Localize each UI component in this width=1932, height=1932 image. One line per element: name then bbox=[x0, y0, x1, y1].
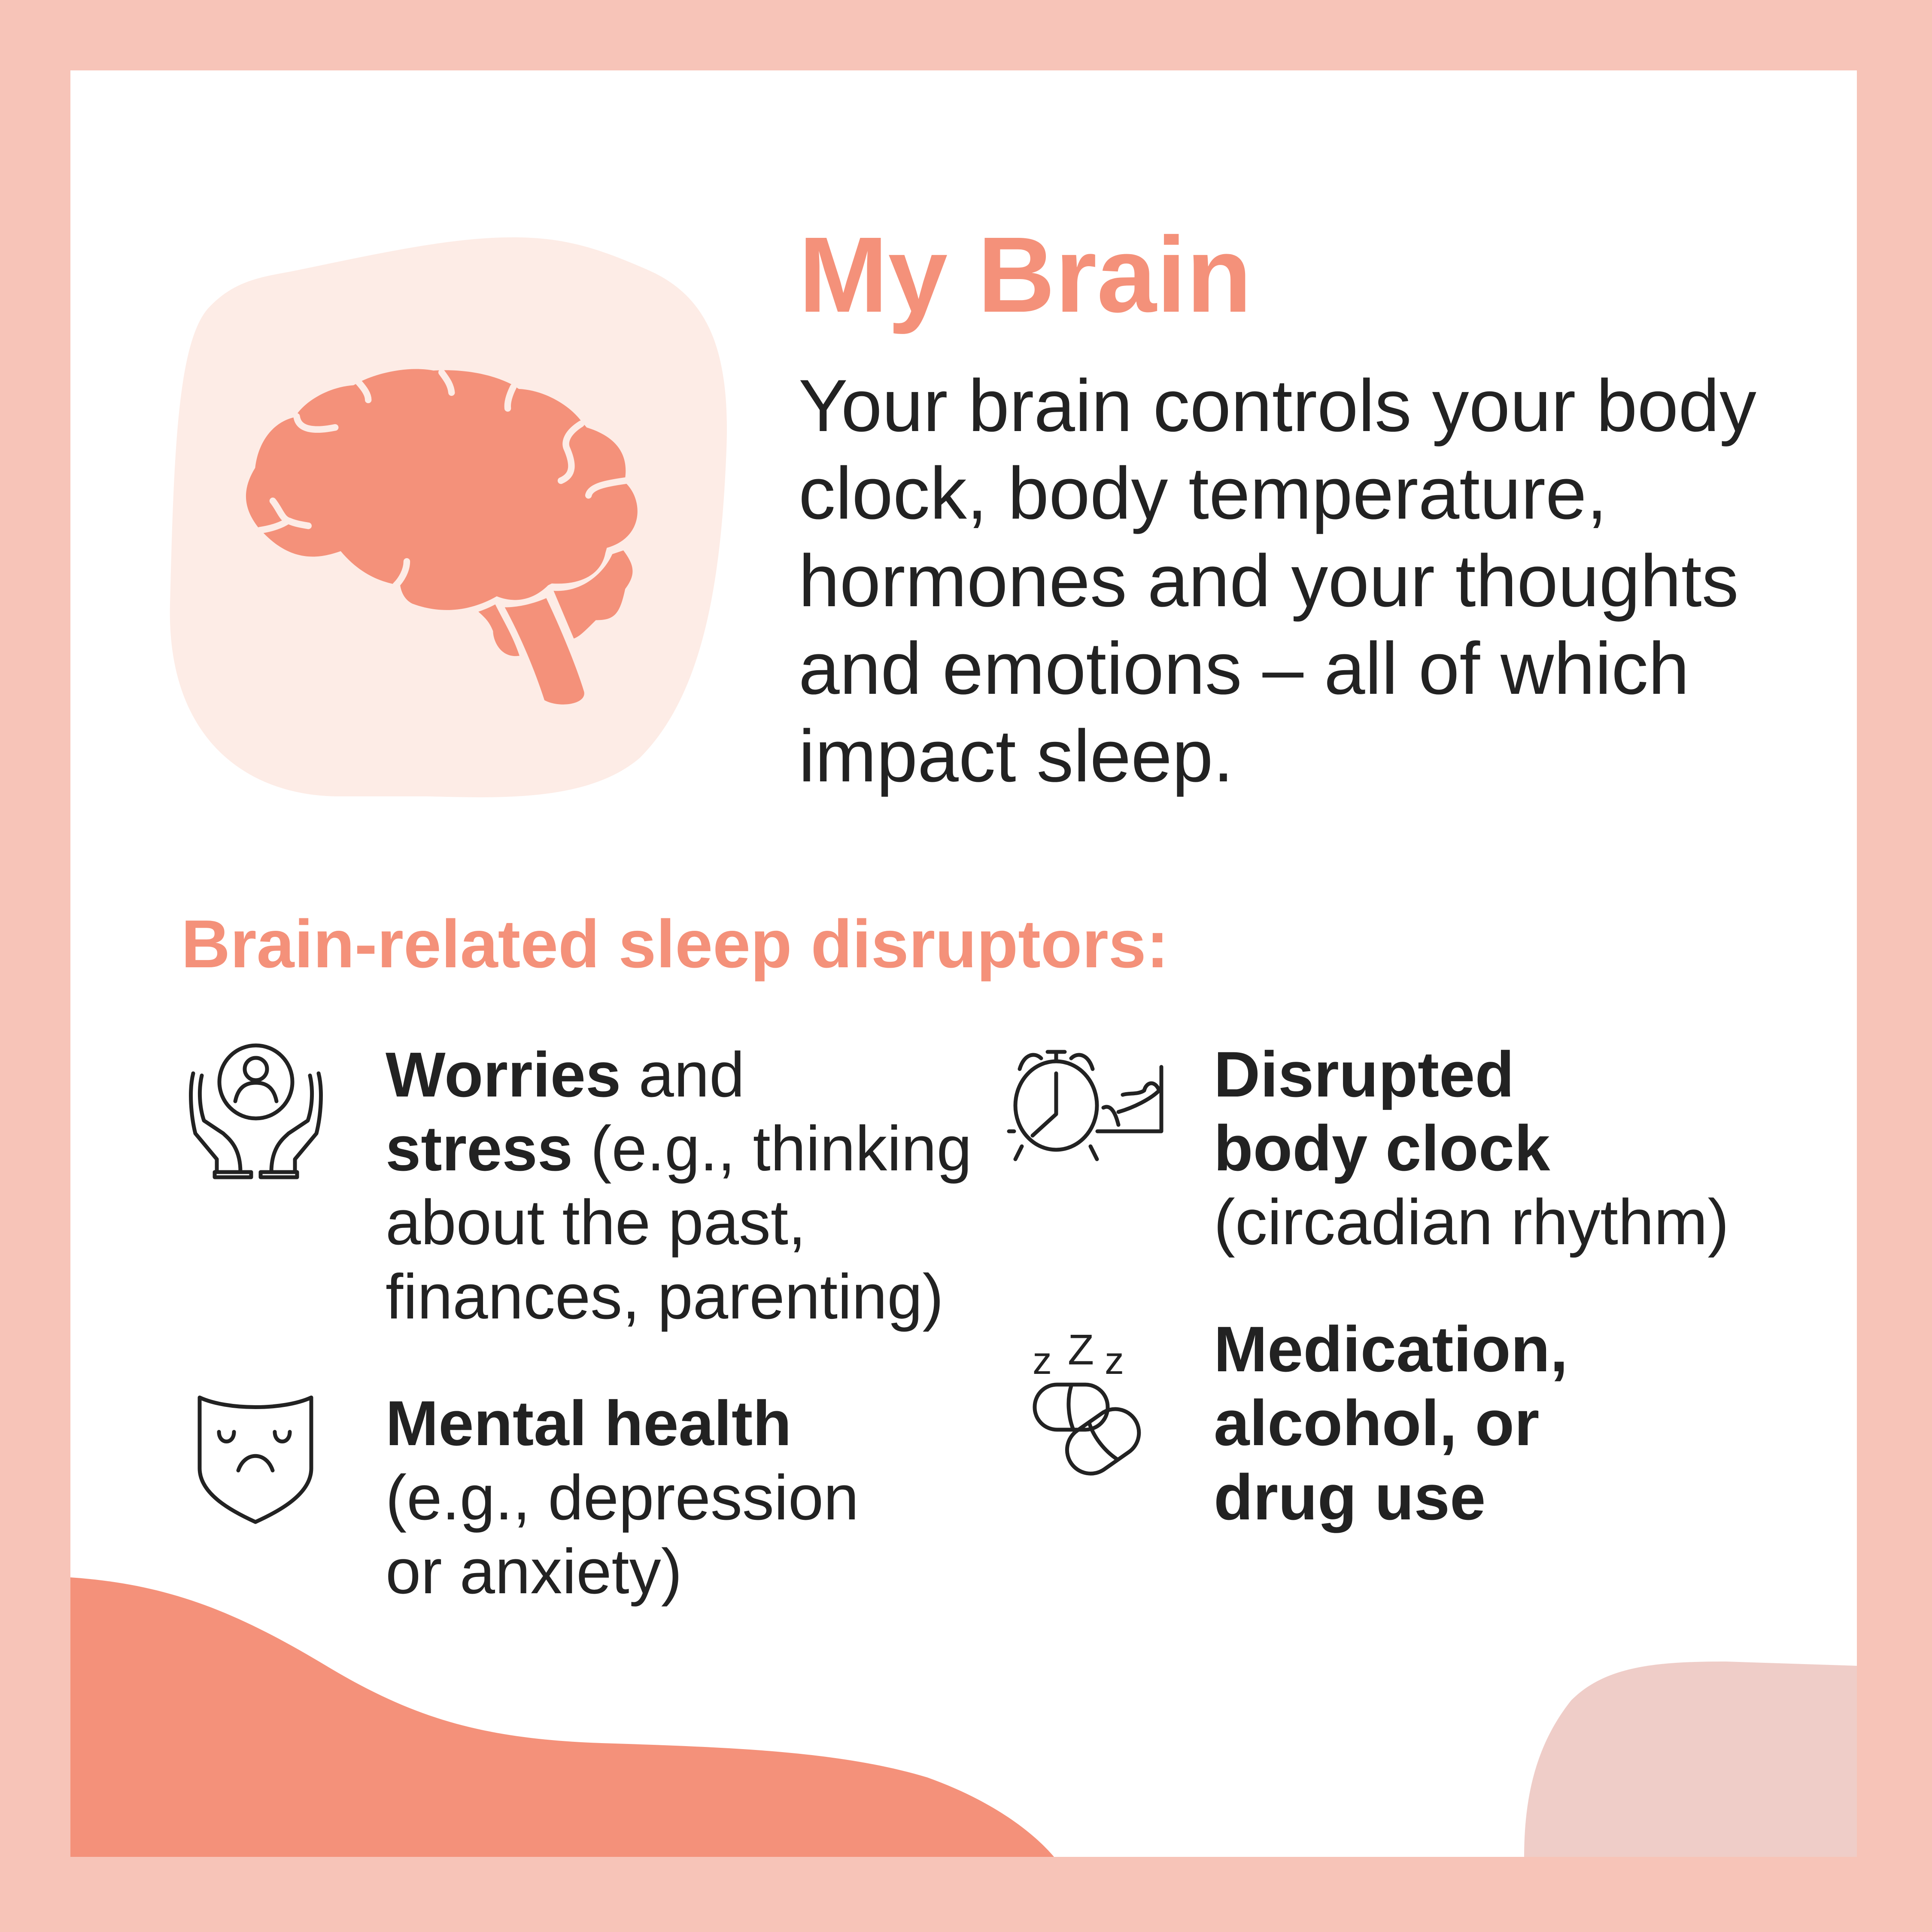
text: disrupted body clock: body clock bbox=[1214, 1112, 1550, 1184]
text: medication bbox=[1214, 1313, 1568, 1533]
text: worries and stress: stress (e.g., thinking bbox=[386, 1113, 972, 1184]
title: My Brain bbox=[799, 215, 1252, 334]
text: mental health: Mental health bbox=[386, 1388, 792, 1459]
intro paragraph: and emotions – all of which bbox=[799, 627, 1689, 710]
text: worries and stress: finances, parenting) bbox=[386, 1261, 944, 1332]
section heading: Brain-related sleep disruptors: bbox=[181, 906, 1169, 982]
icon: hands holding person bbox=[191, 1045, 321, 1177]
text: mental health bbox=[386, 1388, 859, 1607]
icon: zzz pills bbox=[1033, 1326, 1148, 1483]
text: disrupted body clock: (circadian rhythm) bbox=[1214, 1186, 1729, 1258]
text: disrupted body clock: Disrupted bbox=[1214, 1038, 1514, 1110]
text: medication: drug use bbox=[1214, 1461, 1485, 1533]
icon: brain bbox=[246, 369, 638, 705]
text: worries and stress bbox=[386, 1039, 972, 1332]
intro paragraph: impact sleep. bbox=[799, 715, 1233, 797]
intro paragraph: hormones and your thoughts bbox=[799, 540, 1739, 622]
pale blob bbox=[170, 237, 727, 797]
bottom-right pink blob bbox=[1524, 1662, 1857, 1857]
icon: zzz pills: Z bbox=[1068, 1326, 1094, 1374]
intro paragraph bbox=[799, 365, 1756, 797]
intro paragraph: Your brain controls your body bbox=[799, 365, 1756, 447]
bottom-left orange wave bbox=[70, 1577, 1054, 1857]
text: worries and stress: Worries and bbox=[386, 1039, 744, 1110]
brain illustration panel bbox=[170, 237, 727, 797]
text: mental health: or anxiety) bbox=[386, 1536, 682, 1607]
icon: sad mask bbox=[200, 1397, 311, 1522]
text: worries and stress: about the past, bbox=[386, 1187, 806, 1258]
intro paragraph: clock, body temperature, bbox=[799, 452, 1607, 535]
text: mental health: (e.g., depression bbox=[386, 1462, 859, 1533]
text: medication: alcohol, or bbox=[1214, 1387, 1539, 1459]
text: disrupted body clock bbox=[1214, 1038, 1729, 1258]
text: medication: Medication, bbox=[1214, 1313, 1568, 1385]
icon: zzz pills: z bbox=[1105, 1340, 1124, 1382]
icon: alarm clock and bed bbox=[1009, 1052, 1161, 1159]
icon: zzz pills: z bbox=[1033, 1340, 1052, 1382]
